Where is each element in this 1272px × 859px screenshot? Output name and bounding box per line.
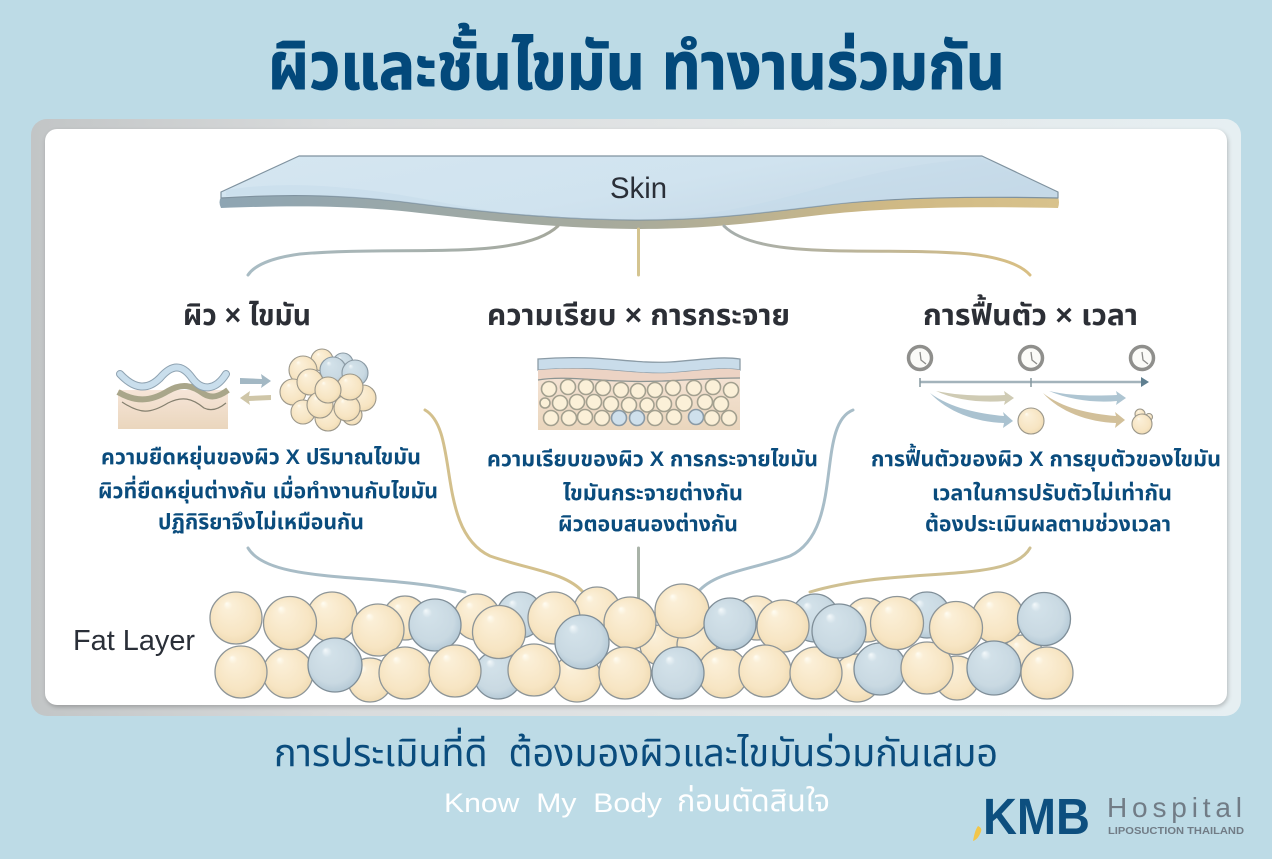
heading: skin and fat: ผิว × ไขมัน [183,299,311,332]
label: Skin: Skin [610,172,667,205]
heading: smoothness and distribution: ความเรียบ × การกระจาย [487,299,790,332]
text block: smoothness and distribution: ผิวตอบสนองต่างกัน [558,512,738,536]
logo: KMB Hospital: KMB [983,788,1090,845]
logo: KMB Hospital: LIPOSUCTION THAILAND [1108,826,1244,837]
text block: recovery and time: เวลาในการปรับตัวไม่เท่ากัน [932,481,1172,505]
text block: elasticity and fat volume [98,445,438,534]
tagline [444,784,830,818]
connectors from skin to columns [248,226,1030,275]
text block: smoothness and distribution: ไขมันกระจายต่างกัน [563,481,743,505]
text block: recovery and time: ต้องประเมินผลตามช่วงเวลา [925,512,1171,536]
icon: skin layers and fat cluster [118,349,376,431]
text block: recovery and time: การฟื้นตัวของผิว X การยุบตัวของไขมัน [871,443,1221,472]
text block: smoothness and distribution [487,447,818,536]
icon: recovery timeline [908,346,1154,434]
tagline: ก่อนตัดสินใจ [677,784,830,818]
text block: elasticity and fat volume: ความยืดหยุ่นของผิว X ปริมาณไขมัน [101,445,421,470]
text block: elasticity and fat volume: ปฏิกิริยาจึงไม่เหมือนกัน [158,510,364,534]
logo: KMB Hospital [973,788,1244,845]
connectors from columns to fat layer [248,410,1030,600]
icon: skin cross-section with fat cells [538,358,740,430]
footer statement: การประเมินที่ดี ต้องมองผิวและไขมันร่วมกันเสมอ [274,727,998,774]
tagline: Know My Body [444,788,663,818]
title: ผิวและชั้นไขมัน ทำงานร่วมกัน [268,22,1005,104]
text block: smoothness and distribution: ความเรียบของผิว X การกระจายไขมัน [487,447,818,471]
text block: elasticity and fat volume: ผิวที่ยืดหยุ่นต่างกัน เมื่อทำงานกับไขมัน [98,475,438,504]
logo: KMB Hospital: Hospital [1107,792,1242,823]
panel: main diagram [31,119,1241,716]
fat layer illustration [210,584,1073,702]
heading: recovery and time: การฟื้นตัว × เวลา [923,294,1138,332]
label: Fat Layer: Fat Layer [73,625,195,657]
skin layer illustration [220,156,1059,229]
text block: recovery and time [871,443,1221,536]
